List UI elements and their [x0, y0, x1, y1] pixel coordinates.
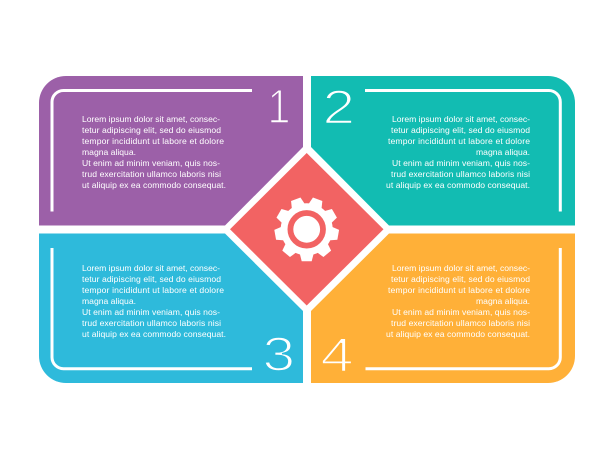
number 1: 1	[268, 80, 290, 134]
text block 1: Lorem ipsum dolor sit amet, consec-	[82, 114, 220, 124]
text block 3: Lorem ipsum dolor sit amet, consec-	[82, 263, 220, 273]
text block 4: Ut enim ad minim veniam, quis nos-	[392, 307, 530, 317]
text block 1: tetur adipiscing elit, sed do eiusmod	[82, 125, 221, 135]
text block 2: Ut enim ad minim veniam, quis nos-	[392, 158, 530, 168]
center diamond	[230, 153, 384, 306]
text block 3: tetur adipiscing elit, sed do eiusmod	[82, 274, 221, 284]
panel 4: orange	[311, 234, 575, 383]
icon: gear	[274, 197, 339, 261]
text block 4: magna aliqua.	[476, 296, 530, 306]
text block 3: magna aliqua.	[82, 296, 136, 306]
panel 1: purple	[39, 76, 303, 226]
number 4: 4	[320, 329, 354, 382]
text block 4: tempor incididunt ut labore et dolore	[388, 285, 530, 295]
text block 1: magna aliqua.	[82, 147, 136, 157]
text block 3: tempor incididunt ut labore et dolore	[82, 285, 224, 295]
text block 4: Lorem ipsum dolor sit amet, consec-	[392, 263, 530, 273]
text block 2: ut aliquip ex ea commodo consequat.	[386, 180, 530, 190]
text block 3: ut aliquip ex ea commodo consequat.	[82, 329, 226, 339]
text block 1: tempor incididunt ut labore et dolore	[82, 136, 224, 146]
panel 3: blue	[39, 234, 303, 383]
bracket 1	[52, 90, 252, 212]
text block 4: trud exercitation ullamco laboris nisi	[391, 318, 530, 328]
text block 1: trud exercitation ullamco laboris nisi	[82, 169, 221, 179]
text block 1: Ut enim ad minim veniam, quis nos-	[82, 158, 220, 168]
text block 4: tetur adipiscing elit, sed do eiusmod	[391, 274, 530, 284]
text block 3: trud exercitation ullamco laboris nisi	[82, 318, 221, 328]
bracket 2	[365, 90, 560, 212]
text block 2: trud exercitation ullamco laboris nisi	[391, 169, 530, 179]
bracket 3	[52, 248, 252, 369]
text block 4: ut aliquip ex ea commodo consequat.	[386, 329, 530, 339]
text block 2: tempor incididunt ut labore et dolore	[388, 136, 530, 146]
text block 2: magna aliqua.	[476, 147, 530, 157]
bracket 4	[366, 248, 560, 369]
text block 1: ut aliquip ex ea commodo consequat.	[82, 180, 226, 190]
text block 2: Lorem ipsum dolor sit amet, consec-	[392, 114, 530, 124]
text block 3: Ut enim ad minim veniam, quis nos-	[82, 307, 220, 317]
number 3: 3	[262, 328, 295, 381]
text block 2: tetur adipiscing elit, sed do eiusmod	[391, 125, 530, 135]
panel 2: teal	[311, 76, 575, 226]
number 2: 2	[322, 81, 355, 134]
